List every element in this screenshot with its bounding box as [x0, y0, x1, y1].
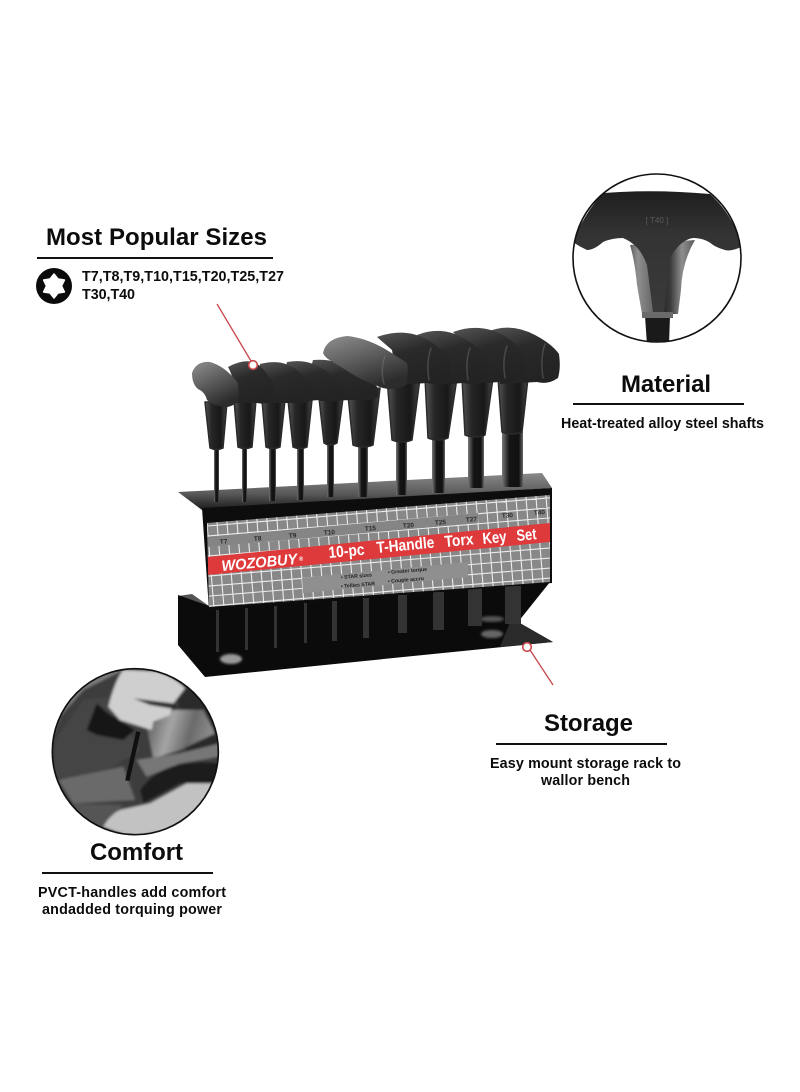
size labels: T20 [403, 522, 415, 530]
band text: T-Handle [376, 535, 435, 557]
size labels: T7 [220, 538, 228, 546]
heading: most popular sizes: Most Popular Sizes [46, 224, 267, 251]
cap T40 [487, 328, 560, 384]
heading rule [573, 403, 744, 405]
size labels: T15 [365, 525, 377, 533]
size strip [207, 513, 478, 547]
product: rack and T-handle set [178, 328, 578, 677]
rack front panel [202, 488, 552, 610]
cap T25 [377, 333, 450, 385]
lower shaft tips [216, 586, 521, 652]
moulded size mark: [ T40 ] [646, 216, 668, 225]
pointer: sizes to handle [217, 304, 257, 369]
band text [221, 526, 538, 575]
band text: WOZOBUY [221, 551, 300, 575]
shafts [214, 432, 523, 502]
list of sizes [82, 269, 284, 303]
cap T15 [308, 360, 378, 401]
label grid [207, 495, 550, 607]
size labels: T40 [534, 509, 546, 517]
info text: • STAR sizes [341, 572, 372, 581]
heading: storage: Storage [544, 710, 633, 737]
panel: most popular sizes [36, 224, 284, 304]
description: andadded torquing power [42, 902, 222, 918]
circle: handle close-up [570, 174, 745, 345]
band text: 10-pc [328, 542, 365, 562]
red band [207, 523, 550, 575]
size labels: T25 [435, 519, 447, 527]
circle: mechanic using tool in engine bay [50, 667, 223, 840]
rack lower left flange [178, 594, 209, 612]
handle stem [630, 240, 695, 314]
description [490, 756, 681, 789]
size labels: T27 [466, 516, 478, 524]
panel: comfort [38, 667, 226, 918]
hex shaft [645, 318, 670, 342]
info block [302, 562, 468, 593]
heading: material: Material [621, 371, 711, 398]
heading: comfort: Comfort [90, 839, 183, 866]
list of sizes: T7,T8,T9,T10,T15,T20,T25,T27 [82, 269, 284, 285]
cap T10 [283, 361, 344, 402]
info text: • Couple accru [388, 576, 424, 585]
cap T9 [258, 362, 314, 404]
handle caps [192, 328, 560, 407]
size labels: T9 [289, 532, 297, 540]
pointer: storage to rack base [523, 643, 553, 685]
info text: • Tellies STAR [341, 581, 375, 590]
size labels: T30 [502, 512, 514, 520]
band text: Set [516, 526, 538, 545]
cap T7 [192, 362, 238, 407]
heading rule [42, 872, 213, 874]
info text: • Greater torque [388, 567, 427, 576]
cap T30 [453, 328, 525, 384]
description [38, 885, 226, 918]
band text: Key [482, 529, 507, 548]
description: wallor bench [540, 773, 630, 789]
size labels: T10 [324, 529, 336, 537]
description: Heat-treated alloy steel shafts [561, 416, 764, 432]
size labels: T8 [254, 535, 262, 543]
rack base highlights [220, 616, 553, 664]
panel: storage [490, 710, 681, 789]
shaft collar [642, 312, 673, 318]
cap T27 [417, 331, 489, 385]
rack lower back and base [178, 582, 553, 677]
cap T20 [323, 336, 408, 389]
tool shaft [127, 732, 138, 781]
band text: ® [299, 556, 304, 563]
heading rule [496, 743, 667, 745]
cap end highlights [382, 344, 545, 384]
handle grips [205, 378, 528, 450]
size labels [220, 509, 546, 546]
panel: material [561, 174, 764, 432]
description: PVCT-handles add comfort [38, 885, 226, 901]
cap T8 [228, 361, 273, 404]
handle crossbar [570, 191, 745, 312]
printed label [207, 495, 550, 607]
heading rule [37, 257, 273, 259]
description: Easy mount storage rack to [490, 756, 681, 772]
list of sizes: T30,T40 [82, 287, 135, 303]
info text [341, 567, 427, 590]
rack top shelf [178, 473, 552, 510]
band text: Torx [444, 531, 474, 551]
icon: torx star [36, 268, 72, 304]
